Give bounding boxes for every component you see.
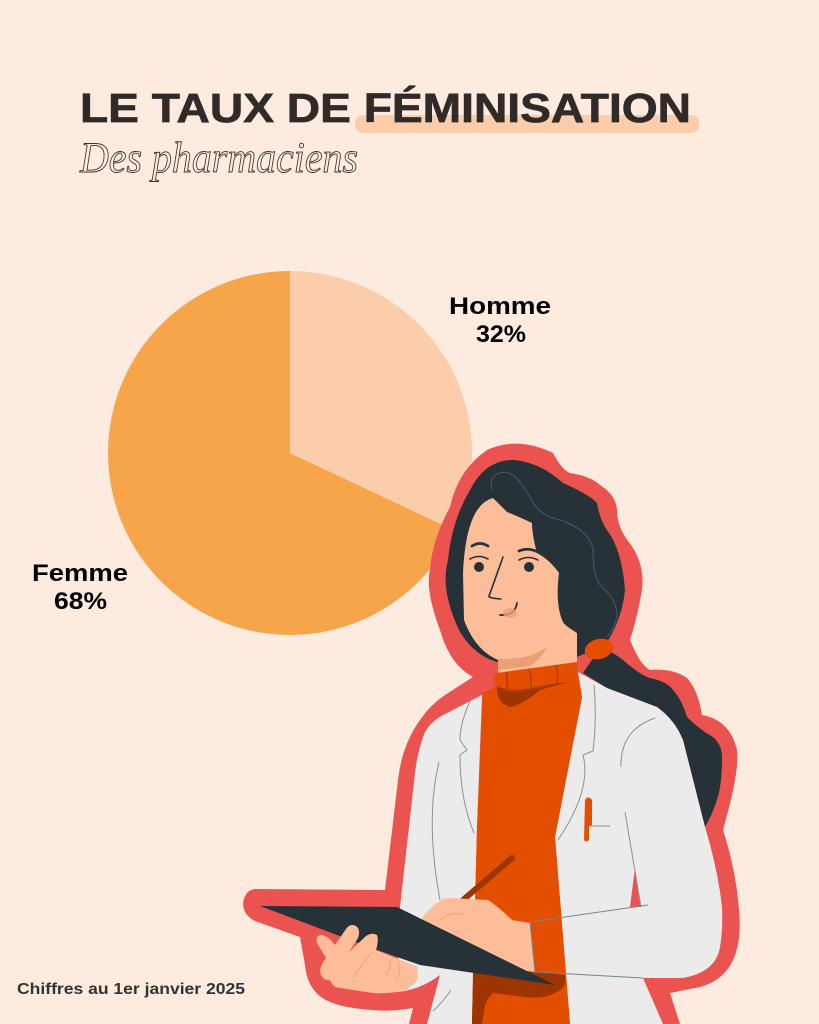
- writing hand: [422, 898, 535, 972]
- label: homme: Homme: [449, 293, 551, 320]
- label: femme: 68%: [54, 588, 107, 615]
- neck shadow: [498, 647, 547, 670]
- bottom shirt shadow: [472, 970, 565, 1024]
- face and neck: [463, 498, 577, 675]
- hand creases: [353, 913, 465, 980]
- pie slice: homme 32%: [290, 271, 472, 530]
- pie slice: femme 68%: [108, 271, 455, 635]
- clipboard: [260, 906, 555, 985]
- turtleneck collar: [494, 662, 578, 691]
- shirt shadow: [497, 683, 565, 707]
- title: LE TAUX DE FÉMINISATION: [80, 85, 691, 131]
- subtitle: Des pharmaciens: [79, 135, 358, 182]
- label: homme: 32%: [476, 321, 526, 348]
- collar folds: [497, 665, 565, 690]
- hair: [446, 460, 625, 662]
- source note: Chiffres au 1er janvier 2025: [17, 981, 245, 998]
- facial features: [470, 544, 538, 618]
- pencil: [463, 858, 512, 900]
- sleeve edge: [530, 905, 648, 978]
- pen in pocket: [584, 798, 592, 842]
- sticker outline: [243, 444, 740, 1024]
- illustration: pharmacist: [243, 444, 740, 1024]
- lab coat: [397, 672, 722, 1024]
- sleeve gap: [630, 868, 641, 907]
- title highlight: [355, 115, 699, 133]
- pie chart: [108, 271, 472, 635]
- hair strand: [491, 472, 617, 637]
- coat seams: [432, 685, 655, 1011]
- label: femme: Femme: [32, 560, 128, 587]
- label: femme: [32, 560, 128, 615]
- holding hand: [317, 925, 418, 993]
- turtleneck shirt: [472, 675, 582, 1024]
- hair tie: [582, 636, 616, 662]
- ponytail: [583, 648, 722, 827]
- label: homme: [449, 293, 551, 348]
